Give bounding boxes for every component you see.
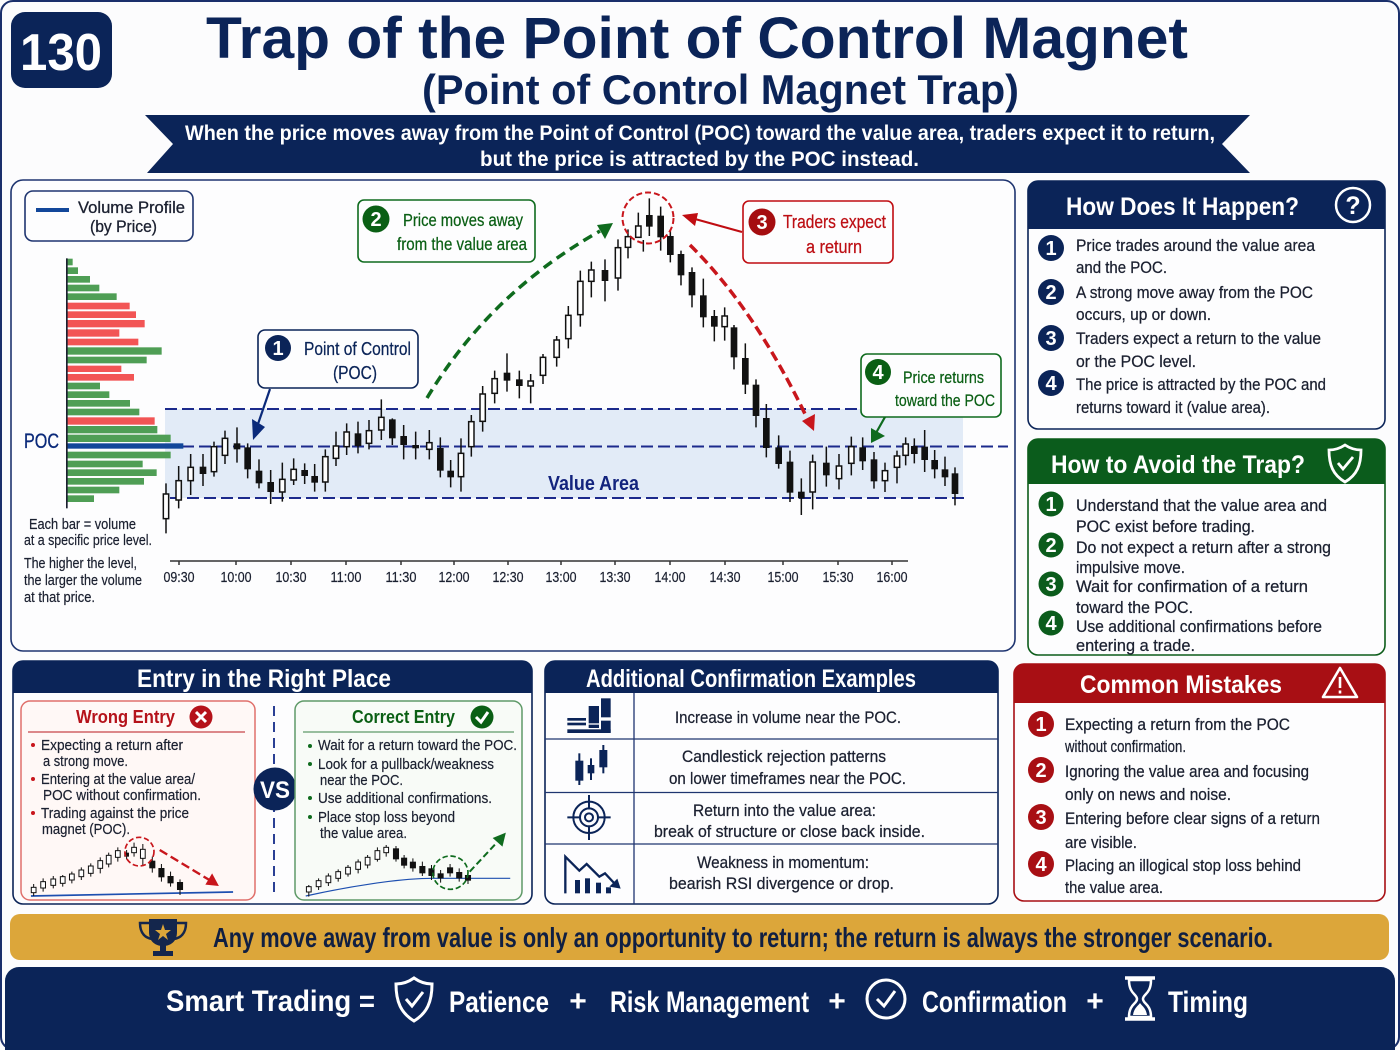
time axis: 13:30 [600, 570, 630, 586]
step list: Traders expect a return to the value [1076, 330, 1321, 348]
correct entry bullets: Wait for a return toward the POC. [318, 738, 517, 754]
footer bar: smart trading formula: Timing [1168, 986, 1248, 1019]
volume profile explanation: at a specific price level. [24, 533, 152, 549]
advice list: entering a trade. [1076, 637, 1195, 655]
callout bar: key takeaway [10, 914, 1389, 960]
panel: common mistakes [1014, 664, 1385, 901]
sub-panel: wrong entry [21, 701, 255, 900]
confirmation text rows: break of structure or close back inside. [654, 823, 925, 841]
correct entry bullets: Look for a pullback/weakness [318, 757, 494, 773]
time axis: 12:30 [492, 570, 524, 586]
confirmation text rows: Weakness in momentum: [697, 854, 869, 872]
callout 4: price returns: toward the POC [895, 391, 995, 410]
icon: shield [396, 978, 432, 1021]
sub-panel: correct entry [295, 701, 522, 900]
volume profile explanation [24, 517, 152, 606]
title [206, 6, 1188, 113]
mistake list: Placing an illogical stop loss behind [1065, 857, 1301, 875]
time axis: 10:30 [276, 570, 306, 586]
time axis: 12:00 [438, 570, 470, 586]
confirmation text rows: bearish RSI divergence or drop. [669, 875, 894, 893]
icon: candlesticks [575, 745, 607, 785]
wrong entry bullets: a strong move. [43, 754, 128, 770]
footer bar: smart trading formula [5, 967, 1395, 1050]
correct entry bullets [308, 738, 517, 842]
wrong entry bullets [31, 738, 201, 838]
mistake list: Expecting a return from the POC [1065, 716, 1290, 734]
panel: entry in the right place [13, 661, 532, 904]
advice list: toward the POC. [1076, 599, 1193, 617]
icon: question mark [1336, 188, 1370, 222]
footer bar: smart trading formula: + [569, 985, 587, 1018]
advice list: Do not expect a return after a strong [1076, 539, 1331, 557]
dashed circle: price top [622, 192, 674, 244]
footer bar: smart trading formula: Confirmation [922, 986, 1067, 1019]
correct entry bullets: Use additional confirmations. [318, 791, 492, 807]
footer bar: smart trading formula: Risk Management [610, 986, 809, 1019]
title: Trap of the Point of Control Magnet [206, 6, 1188, 71]
callout 1: point of control: 1 [272, 338, 284, 360]
time axis: 15:00 [768, 570, 798, 586]
icon: check circle [867, 980, 905, 1018]
time axis: 15:30 [822, 570, 854, 586]
callout 4: price returns: 4 [872, 362, 884, 384]
mistake list: Ignoring the value area and focusing [1065, 763, 1309, 781]
wrong entry bullets: POC without confirmation. [43, 788, 201, 804]
correct entry bullets: the value area. [320, 826, 407, 842]
arrow: callout 4 to POC [871, 417, 885, 443]
sub-panel: wrong entry: Wrong Entry [76, 706, 176, 727]
callout 3: traders expect a return: 3 [756, 212, 768, 234]
wrong entry bullets: Expecting a return after [41, 738, 183, 754]
candlestick chart [163, 198, 958, 533]
icon: shield check [1329, 445, 1361, 482]
panel: how to avoid the trap [1028, 439, 1385, 655]
wrong entry bullets: Entering at the value area/ [41, 772, 196, 788]
legend: volume profile: Volume Profile [78, 199, 185, 217]
wrong entry bullets: magnet (POC). [42, 822, 130, 838]
mistake list: 3 [1035, 807, 1047, 829]
advice list: 1 [1045, 494, 1057, 516]
time axis: 11:00 [330, 570, 362, 586]
heading: How to Avoid the Trap? [1051, 451, 1305, 479]
advice list: POC exist before trading. [1076, 518, 1255, 536]
mistake list: the value area. [1065, 879, 1163, 897]
wrong entry bullets: Trading against the price [41, 806, 189, 822]
arrow: callout 1 to POC line [252, 389, 270, 440]
confirmation text rows: Increase in volume near the POC. [675, 709, 901, 727]
time axis: 14:00 [654, 570, 686, 586]
step list [1038, 235, 1326, 417]
panel: price chart with volume profile [11, 180, 1015, 651]
step list: 4 [1045, 373, 1057, 395]
icon: hourglass [1125, 978, 1155, 1019]
callout 3: traders expect a return: a return [806, 237, 862, 257]
advice list: 3 [1045, 574, 1057, 596]
volume profile explanation: at that price. [24, 590, 95, 606]
mistake list: are visible. [1065, 834, 1137, 852]
icon: question mark: ? [1345, 192, 1361, 220]
mistake list: 1 [1035, 714, 1047, 736]
value area band [165, 409, 963, 498]
volume profile explanation: Each bar = volume [29, 517, 136, 533]
banner: definition ribbon: but the price is attracted by the POC instead. [480, 148, 919, 171]
callout 3: traders expect a return [743, 201, 893, 263]
icon: cross [190, 706, 212, 728]
advice list: impulsive move. [1076, 559, 1185, 577]
badge: lesson number 130 [11, 12, 112, 88]
mistake list: only on news and noise. [1065, 786, 1231, 804]
value area label: Value Area [548, 473, 640, 495]
divider: dashed vertical [273, 706, 275, 895]
mistake list: 2 [1035, 760, 1047, 782]
advice list: Use additional confirmations before [1076, 618, 1322, 636]
mini chart: wrong entry [31, 837, 233, 896]
panel: additional confirmation examples [545, 661, 998, 904]
volume profile histogram [66, 258, 183, 508]
volume profile explanation: the larger the volume [24, 573, 142, 589]
confirmation text rows: on lower timeframes near the POC. [669, 770, 906, 788]
callout 2: price moves away [358, 200, 535, 262]
step list: Price trades around the value area [1076, 237, 1316, 255]
banner: definition ribbon [145, 115, 1250, 173]
step list: The price is attracted by the POC and [1076, 376, 1326, 394]
legend: volume profile: (by Price) [90, 218, 157, 236]
arrow: dashed green up move [427, 223, 613, 398]
step list: 3 [1045, 328, 1057, 350]
time axis: 14:30 [710, 570, 740, 586]
legend: volume profile [25, 191, 193, 241]
callout 4: price returns: Price returns [903, 368, 984, 387]
title: (Point of Control Magnet Trap) [422, 66, 1019, 113]
callout 2: price moves away: from the value area [397, 234, 527, 254]
advice list: 2 [1045, 535, 1057, 557]
step list: 1 [1045, 238, 1057, 260]
arrow: dashed red down move [690, 245, 815, 431]
step list: and the POC. [1076, 259, 1167, 277]
icon: check [470, 706, 494, 728]
callout 4: price returns [861, 354, 1001, 417]
heading: How Does It Happen? [1066, 193, 1299, 221]
step list: occurs, up or down. [1076, 306, 1211, 324]
callout 1: point of control: (POC) [333, 363, 377, 383]
heading: Additional Confirmation Examples [586, 665, 916, 693]
step list: or the POC level. [1076, 353, 1196, 371]
callout 2: price moves away: Price moves away [403, 210, 523, 230]
confirmation text rows: Return into the value area: [693, 802, 876, 820]
advice list [1038, 492, 1331, 655]
time axis: 11:30 [386, 570, 416, 586]
footer bar: smart trading formula: + [828, 985, 846, 1018]
callout 1: point of control [258, 330, 418, 388]
badge: VS: VS [260, 777, 290, 804]
badge: lesson number 130: 130 [20, 24, 102, 82]
value area and POC dashed lines [165, 409, 1008, 498]
correct entry bullets: Place stop loss beyond [318, 810, 455, 826]
mistake list: Entering before clear signs of a return [1065, 810, 1320, 828]
confirmation text rows: Candlestick rejection patterns [682, 748, 886, 766]
advice list: Wait for confirmation of a return [1076, 578, 1308, 596]
correct entry bullets: near the POC. [320, 773, 403, 789]
step list: A strong move away from the POC [1076, 284, 1313, 302]
panel: how does it happen [1028, 181, 1385, 429]
icon: warning triangle [1323, 668, 1357, 697]
footer bar: smart trading formula: Smart Trading = [166, 985, 375, 1018]
mistake list: without confirmation. [1064, 738, 1186, 756]
confirmation text rows [654, 709, 925, 893]
heading: Entry in the Right Place [137, 665, 391, 693]
callout 2: price moves away: 2 [370, 209, 382, 231]
step list: 2 [1045, 282, 1057, 304]
footer bar: smart trading formula: Patience [449, 986, 549, 1019]
POC label: POC [24, 430, 59, 453]
icon: volume bars [567, 698, 611, 733]
advice list: 4 [1045, 613, 1057, 635]
banner: definition ribbon: When the price moves away from the Point of Control (POC) toward the value area, traders expect it to return, [185, 122, 1215, 145]
step list: returns toward it (value area). [1076, 399, 1270, 417]
sub-panel: correct entry: Correct Entry [352, 706, 456, 727]
mistake list [1028, 711, 1320, 897]
heading: Common Mistakes [1080, 671, 1282, 699]
time axis: 16:00 [876, 570, 908, 586]
badge: VS [254, 768, 296, 810]
volume profile explanation: The higher the level, [24, 556, 137, 572]
icon: trophy [140, 919, 186, 956]
time axis [164, 561, 908, 586]
mistake list: 4 [1035, 854, 1047, 876]
advice list: Understand that the value area and [1076, 497, 1327, 515]
icon: target [567, 795, 611, 840]
footer bar: smart trading formula: + [1086, 985, 1104, 1018]
icon: falling momentum [565, 857, 621, 893]
time axis: 10:00 [220, 570, 252, 586]
time axis: 09:30 [164, 570, 194, 586]
callout 1: point of control: Point of Control [304, 339, 411, 359]
arrow: callout 3 to top [682, 213, 742, 232]
callout 3: traders expect a return: Traders expect [783, 212, 886, 232]
mini chart: correct entry [306, 833, 510, 897]
time axis: 13:00 [546, 570, 576, 586]
